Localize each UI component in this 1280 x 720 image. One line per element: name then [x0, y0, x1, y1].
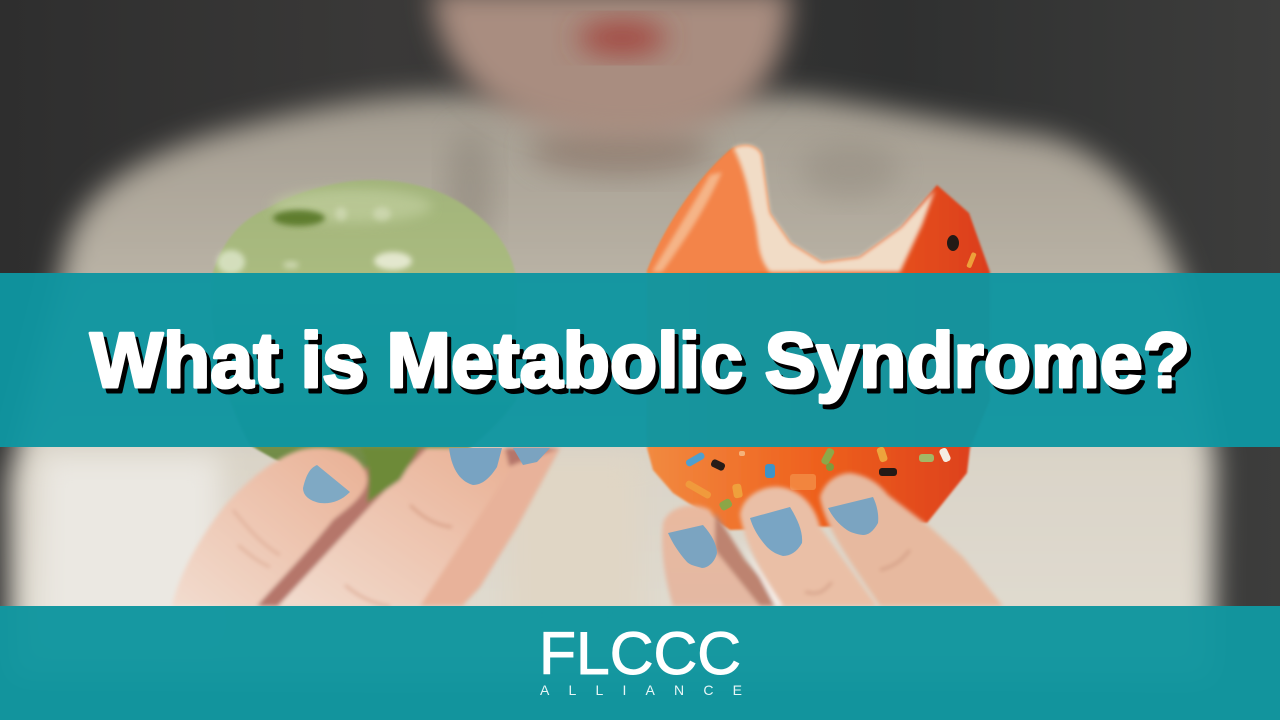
finger two	[740, 487, 877, 606]
icon: blue nails right hand	[668, 497, 878, 568]
index finger	[278, 448, 510, 606]
title banner	[0, 273, 1280, 447]
title shadow and text: What is Metabolic Syndrome?	[94, 321, 1194, 409]
icon: blue nails left hand	[303, 448, 550, 503]
finger three	[820, 473, 1003, 606]
back finger	[400, 448, 560, 606]
doughnut	[647, 145, 990, 530]
footer band	[0, 606, 1280, 720]
shadow gap	[715, 512, 785, 606]
apple	[211, 180, 516, 500]
doughnut crumb	[733, 145, 935, 272]
sweater	[8, 94, 1215, 680]
sprinkles	[685, 451, 706, 467]
left hand	[172, 448, 560, 606]
logo: FLCCC Alliance: FLCCC	[539, 620, 741, 687]
thumb	[172, 448, 367, 606]
sweater fold shadows	[446, 130, 494, 250]
finger one	[662, 506, 777, 606]
face	[432, 0, 790, 138]
right hand	[662, 473, 1003, 606]
title shadow and text: What is Metabolic Syndrome?	[90, 316, 1190, 404]
logo: FLCCC Alliance: ALLIANCE	[540, 682, 742, 698]
